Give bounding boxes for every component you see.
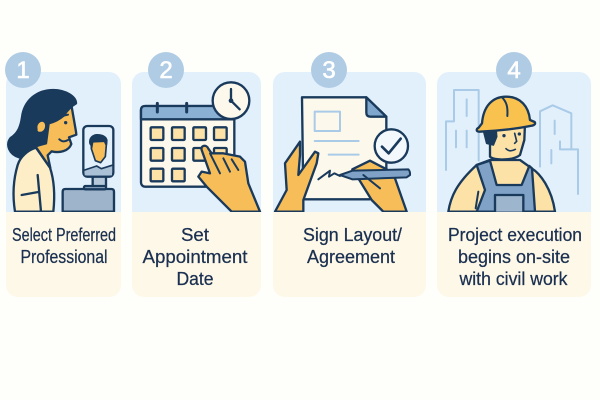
- step number 1: [5, 52, 41, 88]
- panel: step 1: [5, 52, 121, 297]
- caption box 4: with civil work: [459, 269, 568, 289]
- caption box 1: [6, 212, 121, 297]
- caption box 2: [132, 212, 261, 297]
- step number 2: 2: [159, 57, 173, 84]
- panel: step 3: [273, 52, 426, 297]
- panel: step 2: [132, 52, 261, 297]
- illustration: calendar, clock and hand: [141, 82, 260, 212]
- step number 4: [496, 52, 532, 88]
- panel: step 4: [437, 52, 591, 297]
- caption box 2: Appointment: [142, 247, 248, 267]
- caption box 2: Date: [176, 269, 214, 289]
- step number 1: 1: [16, 57, 30, 84]
- caption box 4: Project execution: [448, 225, 582, 245]
- caption box 3: [273, 212, 426, 297]
- caption box 1: Professional: [20, 247, 108, 267]
- caption box 4: begins on-site: [458, 247, 570, 267]
- caption box 1: Select Preferred: [12, 225, 116, 245]
- illustration: signing a document: [275, 97, 410, 212]
- caption box 2: Set: [181, 225, 209, 245]
- illustration: woman and video call: [8, 90, 114, 212]
- caption box 3: Sign Layout/: [303, 225, 402, 245]
- illustration: construction worker: [446, 90, 578, 212]
- step number 4: 4: [507, 57, 521, 84]
- step number 2: [148, 52, 184, 88]
- caption box 4: [437, 212, 591, 297]
- caption box 3: Agreement: [307, 247, 395, 267]
- step number 3: [311, 52, 347, 88]
- step number 3: 3: [322, 57, 336, 84]
